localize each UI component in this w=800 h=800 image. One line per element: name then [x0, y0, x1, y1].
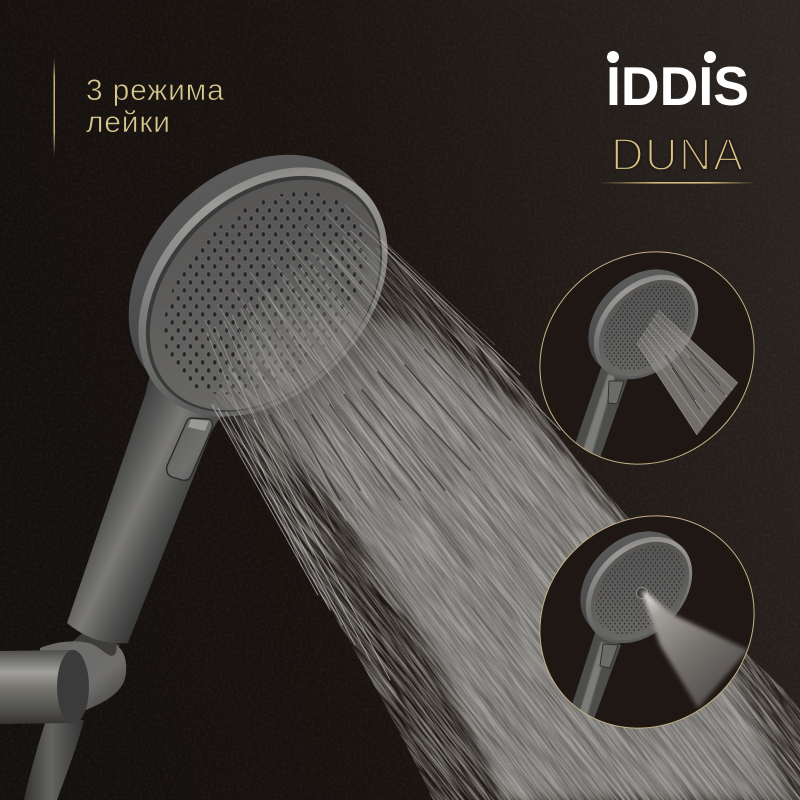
- nozzle array: [124, 152, 406, 434]
- icon: mode switch button: [167, 418, 213, 480]
- dark gaps between jets: [270, 350, 510, 505]
- inset: soft rain mode: [541, 252, 754, 464]
- inset: focused jet mode: [540, 516, 754, 728]
- shower head: [79, 105, 437, 466]
- caption: shower modes: 3 режима: [86, 74, 225, 107]
- inset outline: soft rain: [496, 208, 798, 508]
- main water spray: [212, 242, 800, 800]
- shower handle with mode button: [67, 375, 235, 643]
- inset outline: focused jet: [496, 472, 798, 772]
- model name: DUNA: [611, 129, 743, 180]
- gold underline: [600, 182, 756, 184]
- hose and wall holder: [0, 632, 126, 800]
- brand logo: IDDIS: [606, 55, 749, 117]
- water streaks over the face: [205, 205, 560, 680]
- vertical gold rule: [54, 58, 55, 156]
- caption: shower modes: лейки: [86, 106, 171, 139]
